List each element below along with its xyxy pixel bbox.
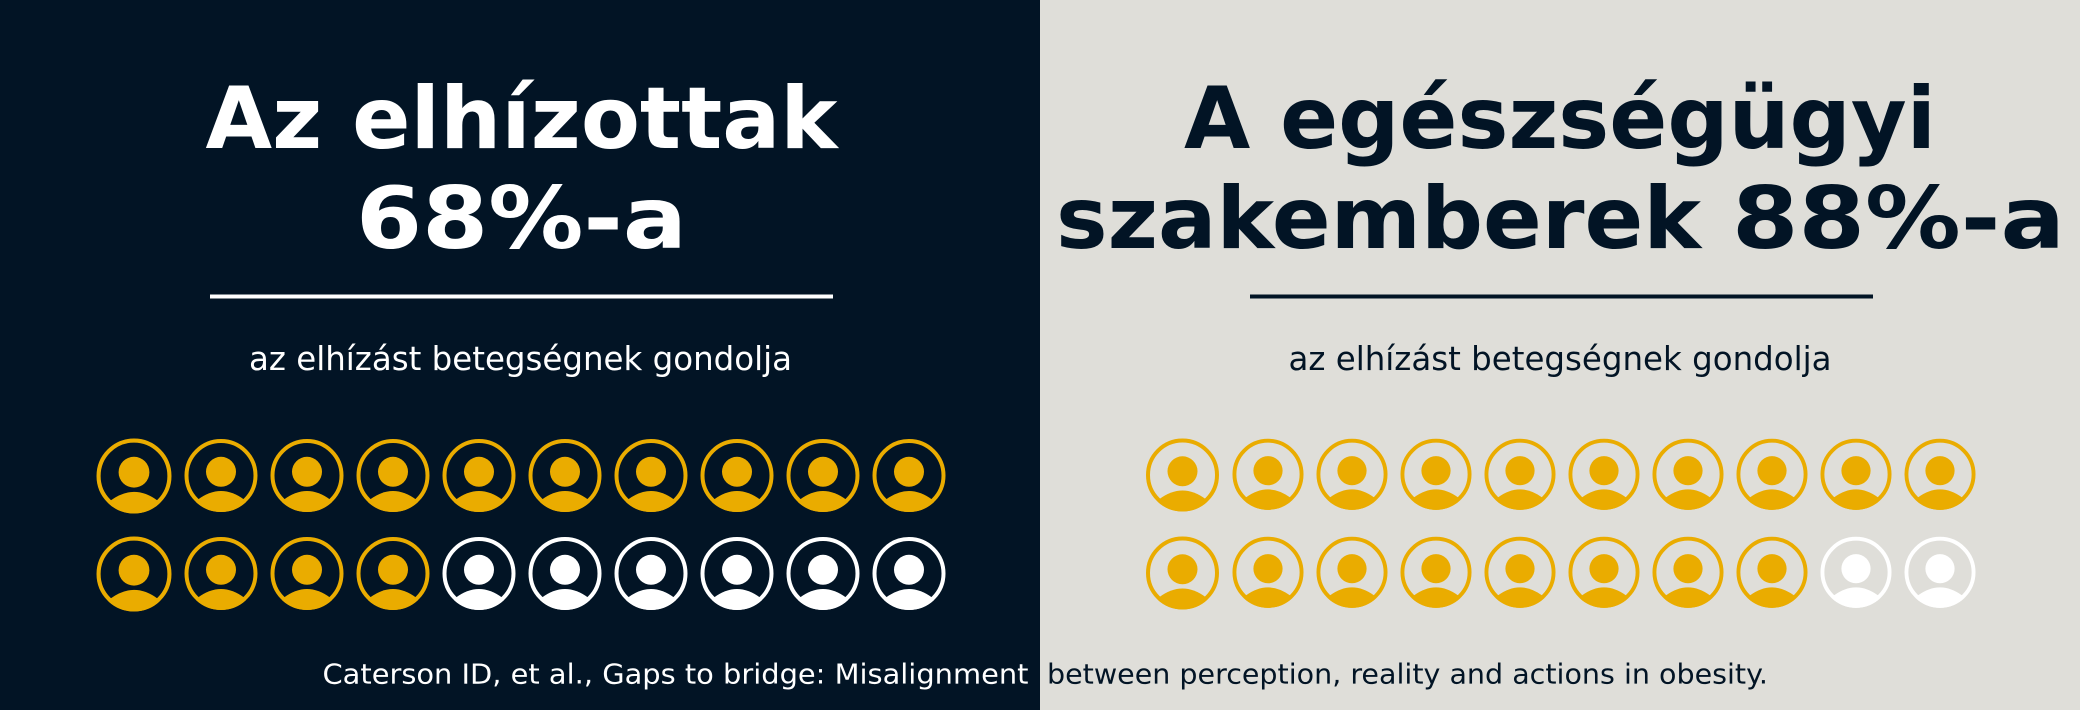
- source: right part: between perception, reality and actions in obesity.: [1047, 658, 1768, 690]
- panel: right light background: [1040, 0, 2080, 710]
- icon: row 1: [1148, 440, 1974, 512]
- divider: right: [1250, 294, 1873, 298]
- heading: right: A egészségügyi: [1184, 69, 1936, 169]
- icon: row 1: [99, 441, 944, 513]
- icon: row 2: [1148, 538, 1974, 610]
- heading: left: Az elhízottak: [206, 69, 839, 169]
- panel: left dark background: [0, 0, 1040, 710]
- subtitle: left: az elhízást betegségnek gondolja: [249, 339, 792, 378]
- subtitle: right: az elhízást betegségnek gondolja: [1288, 339, 1832, 378]
- pictogram: left 68 percent: [99, 441, 944, 611]
- icon: row 2: [99, 539, 944, 611]
- pictogram: right 88 percent: [1148, 440, 1974, 610]
- heading: right: 88%-a: [1732, 169, 2065, 269]
- heading: right: szakemberek: [1056, 169, 1703, 269]
- source: left part: Caterson ID, et al., Gaps to bridge: Misalignment: [322, 658, 1029, 690]
- heading: right: [1056, 69, 2065, 269]
- heading: left: 68%-a: [356, 169, 687, 269]
- divider: left: [210, 294, 833, 298]
- heading: left: [206, 69, 839, 269]
